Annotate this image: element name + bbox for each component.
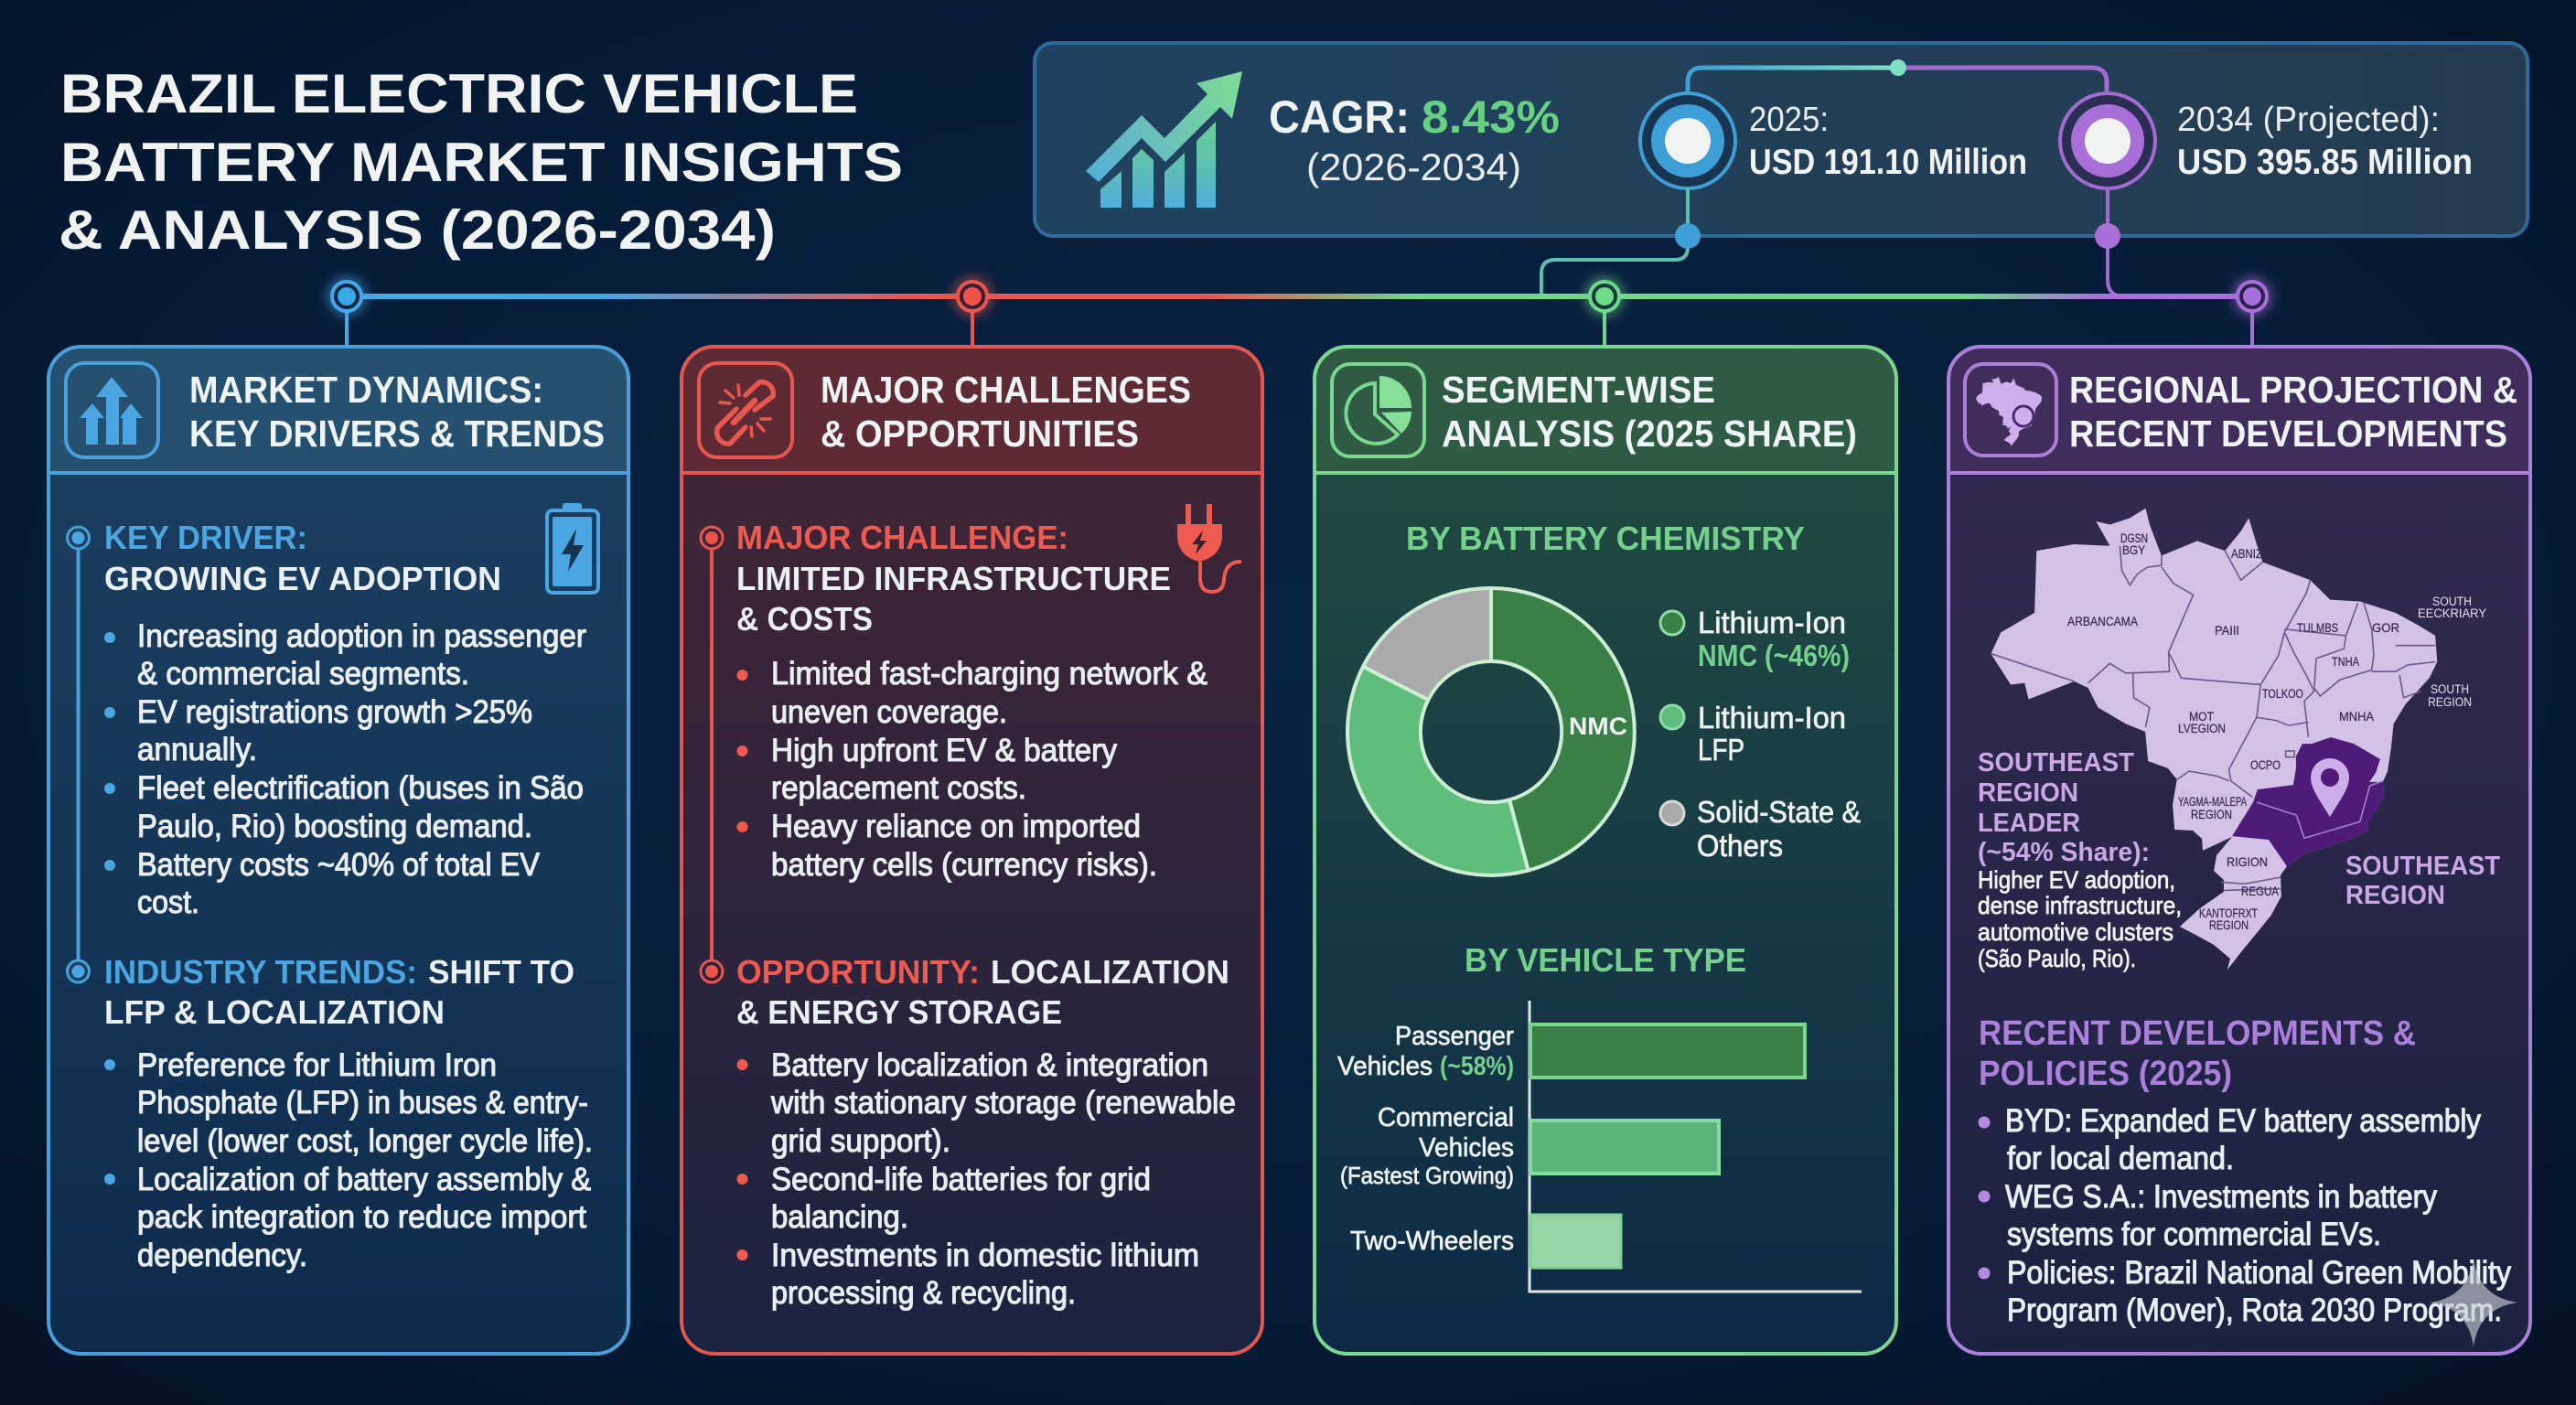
section: key driver: cost.: [137, 885, 199, 920]
section: key driver: KEY DRIVER:: [104, 519, 307, 556]
legend: Others: [1697, 829, 1783, 863]
panel: segment-wise analysis: [1315, 347, 1896, 1354]
section: industry trends: [104, 953, 593, 1273]
section: opportunity: LOCALIZATION: [991, 953, 1229, 991]
section: key driver: Paulo, Rio) boosting demand.: [137, 809, 532, 844]
callout: southeast leader: LEADER: [1978, 809, 2080, 838]
bar chart: Commercial: [1378, 1103, 1514, 1132]
map of Brazil: SOUTH: [2431, 682, 2469, 696]
market size 2034: USD 395.85 Million: [2177, 143, 2473, 182]
map of Brazil: OCPO: [2250, 758, 2281, 772]
map of Brazil: DGSN: [2120, 531, 2148, 545]
section: industry trends: Preference for Lithium Iron: [137, 1047, 497, 1083]
market size 2034: [2177, 101, 2473, 182]
icon: sparkle watermark: [2430, 1259, 2517, 1346]
section: major challenge: High upfront EV & battery: [771, 733, 1117, 768]
panel header: [682, 347, 1262, 473]
map of Brazil: TULMBS: [2297, 621, 2338, 635]
legend: [1660, 606, 1861, 863]
bar chart: Passenger: [1395, 1022, 1514, 1051]
connectors: summary box to timeline: [1541, 188, 2124, 296]
section: industry trends: Localization of battery assembly &: [137, 1162, 591, 1197]
heading: by battery chemistry: BY BATTERY CHEMISTRY: [1406, 520, 1805, 557]
title: & ANALYSIS (2026-2034): [59, 199, 776, 261]
bar chart: Vehicles: [1337, 1052, 1433, 1081]
market size 2034: 2034 (Projected):: [2177, 101, 2440, 139]
panel header: [1315, 347, 1896, 473]
icon: location pin: [2311, 758, 2349, 817]
CAGR value: [1269, 91, 1560, 188]
callout: southeast leader: REGION: [1978, 778, 2078, 808]
heading: RECENT DEVELOPMENTS: [2069, 413, 2507, 455]
timeline rail: [68, 527, 90, 982]
section: major challenge: Limited fast-charging network &: [771, 656, 1208, 692]
title: BATTERY MARKET INSIGHTS: [60, 132, 903, 193]
callout: southeast leader: (~54% Share):: [1978, 838, 2150, 867]
section: major challenge: replacement costs.: [771, 770, 1026, 806]
section: recent developments: WEG S.A.: Investments in battery: [2005, 1179, 2437, 1215]
connector: between market nodes: [1688, 59, 2107, 93]
market size 2025: [1749, 101, 2027, 182]
section: industry trends: level (lower cost, longer cycle life).: [137, 1123, 593, 1159]
map of Brazil: REGION: [2428, 695, 2472, 709]
timeline connector with four nodes: [328, 278, 2270, 348]
panel: major challenges: [682, 347, 1262, 1354]
map of Brazil: LVEGION: [2178, 722, 2226, 735]
heading: [821, 369, 1191, 455]
section: key driver: Battery costs ~40% of total EV: [137, 847, 541, 883]
section: recent developments: for local demand.: [2007, 1141, 2234, 1176]
section: major challenge: & COSTS: [736, 600, 873, 638]
section: recent developments: Program (Mover), Rota 2030 Program.: [2007, 1292, 2502, 1328]
section: major challenge: uneven coverage.: [771, 694, 1007, 730]
label: southeast region: [2345, 852, 2500, 910]
label: southeast region: SOUTHEAST: [2345, 852, 2500, 881]
node: 2025 value: [1640, 93, 1735, 188]
heading: by vehicle type: BY VEHICLE TYPE: [1465, 941, 1746, 979]
panel: CAGR and market size summary: [1035, 43, 2528, 236]
section: recent developments: systems for commercial EVs.: [2007, 1217, 2381, 1252]
map of Brazil: [1991, 509, 2486, 970]
icon: broken chain: [699, 363, 792, 457]
map of Brazil: EECKRIARY: [2418, 606, 2486, 620]
icon: battery: [547, 503, 598, 593]
section: opportunity: grid support).: [771, 1123, 950, 1159]
section: opportunity: with stationary storage (renewable: [770, 1085, 1236, 1121]
donut chart: [1347, 588, 1635, 875]
map of Brazil: RIGION: [2227, 855, 2268, 869]
panel: market dynamics: [48, 347, 628, 1354]
heading: & OPPORTUNITIES: [821, 413, 1139, 455]
heading: [1442, 369, 1857, 455]
donut chart: NMC: [1569, 713, 1627, 740]
bar chart: [1337, 1001, 1862, 1292]
heading: [2069, 369, 2517, 455]
bar chart: (~58%): [1440, 1052, 1514, 1081]
map of Brazil: KANTOFRXT: [2199, 906, 2258, 920]
section: opportunity: [736, 953, 1236, 1311]
map of Brazil: REGION: [2191, 808, 2232, 821]
section: major challenge: Heavy reliance on imported: [771, 809, 1141, 844]
node: 2034 value: [2060, 93, 2155, 188]
heading: MARKET DYNAMICS:: [189, 369, 543, 411]
section: opportunity: balancing.: [771, 1199, 908, 1235]
callout: southeast leader: [1978, 748, 2182, 972]
map of Brazil: PAIII: [2215, 624, 2239, 638]
icon: plug: [1177, 504, 1241, 592]
icon: Brazil map: [1965, 364, 2056, 456]
map of Brazil: MNHA: [2339, 710, 2374, 724]
map of Brazil: BGY: [2122, 543, 2145, 557]
heading: SEGMENT-WISE: [1442, 369, 1715, 411]
section: recent developments: POLICIES (2025): [1979, 1055, 2232, 1093]
map of Brazil: ABNIZ: [2231, 547, 2262, 561]
map of Brazil: REGUA: [2241, 885, 2279, 898]
market size 2025: USD 191.10 Million: [1749, 143, 2027, 182]
CAGR value: CAGR:: [1269, 91, 1410, 143]
section: industry trends: dependency.: [137, 1238, 307, 1273]
section: key driver: Increasing adoption in passenger: [137, 618, 586, 654]
bar chart: Vehicles: [1419, 1133, 1514, 1163]
callout: southeast leader: Higher EV adoption,: [1978, 866, 2175, 894]
timeline rail: [701, 527, 723, 982]
bar chart: Two-Wheelers: [1350, 1227, 1514, 1256]
CAGR value: 8.43%: [1422, 91, 1560, 143]
callout: southeast leader: SOUTHEAST: [1978, 748, 2134, 778]
map of Brazil: SOUTH: [2432, 595, 2472, 608]
section: recent developments: [1978, 1014, 2511, 1328]
map of Brazil: TNHA: [2332, 655, 2359, 669]
callout: southeast leader: dense infrastructure,: [1978, 892, 2182, 919]
CAGR value: (2026-2034): [1306, 145, 1521, 188]
section: industry trends: LFP & LOCALIZATION: [104, 993, 445, 1031]
section: opportunity: OPPORTUNITY:: [736, 953, 980, 991]
heading: KEY DRIVERS & TRENDS: [189, 413, 605, 455]
icon: upward arrows: [66, 363, 158, 457]
legend: Solid-State &: [1697, 795, 1861, 829]
section: industry trends: Phosphate (LFP) in buses & entry-: [137, 1085, 588, 1121]
heading: MAJOR CHALLENGES: [821, 369, 1191, 411]
map of Brazil: YAGMA-MALEPA: [2178, 795, 2247, 809]
section: key driver: [104, 519, 586, 920]
section: industry trends: pack integration to reduce import: [137, 1199, 586, 1235]
section: industry trends: INDUSTRY TRENDS:: [104, 953, 417, 991]
icon: pie chart: [1332, 364, 1424, 456]
map of Brazil: REGION: [2209, 918, 2249, 932]
section: recent developments: BYD: Expanded EV battery assembly: [2005, 1103, 2481, 1139]
legend: Lithium-Ion: [1698, 701, 1846, 735]
section: major challenge: [736, 519, 1208, 883]
section: major challenge: battery cells (currency risks).: [771, 847, 1157, 883]
section: recent developments: RECENT DEVELOPMENTS &: [1979, 1014, 2416, 1053]
section: key driver: annually.: [137, 732, 257, 767]
section: major challenge: MAJOR CHALLENGE:: [736, 519, 1068, 556]
panel: regional projection: [1948, 347, 2530, 1354]
heading: REGIONAL PROJECTION &: [2069, 369, 2517, 411]
heading: ANALYSIS (2025 SHARE): [1442, 413, 1857, 455]
section: opportunity: processing & recycling.: [771, 1275, 1076, 1311]
bar chart: (Fastest Growing): [1340, 1162, 1514, 1189]
label: southeast region: REGION: [2345, 881, 2445, 910]
section: key driver: GROWING EV ADOPTION: [104, 560, 501, 597]
heading: [189, 369, 605, 455]
icon: growth chart: [1086, 71, 1242, 208]
title: BRAZIL ELECTRIC VEHICLE: [60, 63, 858, 124]
section: opportunity: Battery localization & integration: [771, 1047, 1208, 1083]
section: recent developments: Policies: Brazil National Green Mobility: [2007, 1255, 2511, 1291]
section: opportunity: & ENERGY STORAGE: [736, 993, 1062, 1031]
map of Brazil: GOR: [2372, 621, 2399, 635]
section: opportunity: Investments in domestic lithium: [771, 1238, 1199, 1273]
section: opportunity: Second-life batteries for grid: [771, 1162, 1151, 1197]
section: major challenge: LIMITED INFRASTRUCTURE: [736, 560, 1171, 597]
callout: southeast leader: (São Paulo, Rio).: [1978, 945, 2136, 972]
section: key driver: Fleet electrification (buses in São: [137, 770, 584, 806]
section: key driver: EV registrations growth >25%: [137, 694, 532, 730]
panel header: [1948, 347, 2530, 473]
legend: NMC (~46%): [1698, 638, 1850, 672]
panel header: [48, 347, 628, 473]
callout: southeast leader: automotive clusters: [1978, 918, 2174, 946]
legend: LFP: [1698, 733, 1744, 767]
title: [59, 63, 903, 261]
map of Brazil: MOT: [2189, 710, 2214, 724]
market size 2025: 2025:: [1749, 101, 1829, 139]
legend: Lithium-Ion: [1698, 606, 1846, 639]
map of Brazil: TOLKOO: [2262, 687, 2303, 701]
map of Brazil: ARBANCAMA: [2067, 615, 2138, 628]
section: key driver: & commercial segments.: [137, 656, 469, 692]
section: industry trends: SHIFT TO: [428, 953, 574, 991]
